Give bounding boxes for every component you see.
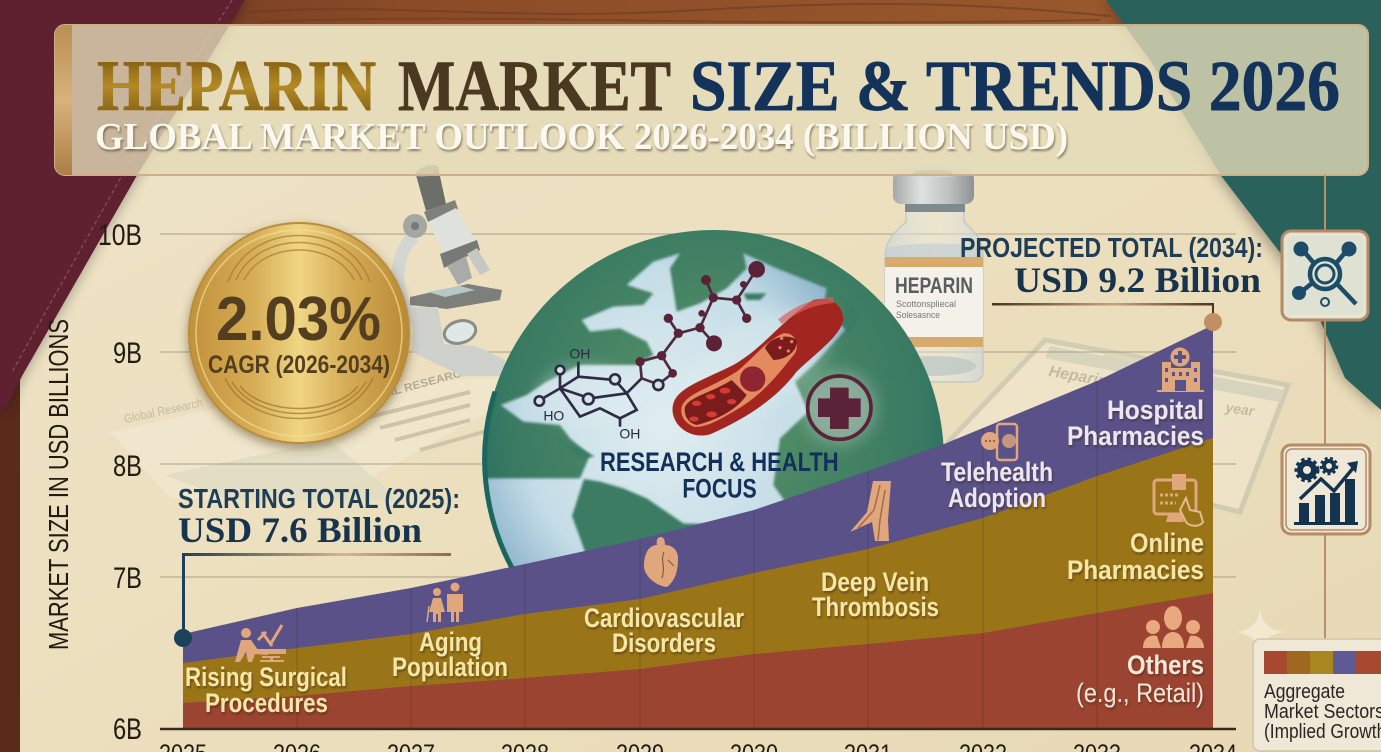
y axis tick labels: 6B (113, 713, 142, 746)
label: online pharmacies (1067, 528, 1204, 585)
icon: heparin vial: HEPARIN (895, 273, 973, 298)
icon: people group (1143, 606, 1204, 648)
label: telehealth adoption: Telehealth (941, 457, 1053, 487)
label: deep vein thrombosis: Thrombosis (812, 592, 939, 622)
y axis tick labels: 10B (98, 219, 142, 252)
label: rising surgical procedures (185, 662, 347, 718)
label: rising surgical procedures: Procedures (205, 688, 328, 718)
icon: elderly couple (427, 582, 463, 622)
decorative sparkle star (1236, 608, 1285, 656)
sector labels (185, 395, 1204, 718)
icon: online pharmacy monitor (1154, 474, 1203, 526)
label: telehealth adoption: Adoption (948, 483, 1046, 513)
label: online pharmacies: Pharmacies (1067, 555, 1204, 585)
icon: microscope (398, 163, 505, 376)
callout: projected total 2034 (960, 232, 1263, 331)
globe caption: RESEARCH & HEALTH (600, 447, 839, 477)
y axis title: MARKET SIZE IN USD BILLIONS (43, 319, 74, 650)
label: cardiovascular disorders: Cardiovascular (584, 603, 744, 633)
y axis tick labels (98, 219, 142, 746)
faded clipboard (950, 340, 1288, 512)
label: telehealth adoption (941, 457, 1053, 513)
label: aging population: Aging (419, 627, 482, 657)
label: aging population: Population (392, 652, 508, 682)
callout: starting total 2025: STARTING TOTAL (2025): (178, 483, 460, 514)
icon: telehealth phone (981, 424, 1017, 460)
area: hospital pharmacies and telehealth (purple) (183, 325, 1213, 729)
legend text (1264, 681, 1381, 743)
icon box: molecular research (1282, 231, 1368, 320)
globe illustration: OH (569, 345, 590, 361)
x axis year labels (159, 740, 1237, 752)
label: online pharmacies: Online (1130, 528, 1204, 558)
globe illustration (480, 230, 944, 690)
faded research documents: GENERAL RESEARCH (343, 366, 471, 411)
globe rim (485, 392, 540, 608)
label: cardiovascular disorders: Disorders (612, 628, 716, 658)
icon: surgery (235, 625, 286, 662)
title: MARKET (398, 46, 671, 126)
icon: heparin vial: Scottonspliecal (896, 299, 956, 310)
label: deep vein thrombosis (812, 567, 939, 622)
stacked area chart (183, 325, 1213, 729)
faded clipboard: Heparin (1047, 363, 1109, 390)
area: others (red) (183, 593, 1213, 729)
icon: heparin molecule (535, 261, 765, 427)
gold CAGR coin (189, 223, 409, 443)
label: deep vein thrombosis: Deep Vein (821, 567, 929, 597)
label: others: Others (1127, 650, 1204, 680)
subtitle: GLOBAL MARKET OUTLOOK 2026-2034 (BILLION USD) (95, 116, 1068, 158)
y axis tick labels: 9B (113, 337, 142, 370)
label: hospital pharmacies: Pharmacies (1067, 421, 1204, 451)
icon: heart (644, 537, 678, 587)
x axis line (160, 728, 1236, 730)
label: cardiovascular disorders (584, 603, 744, 658)
icon: heparin vial: Solesasnce (896, 310, 940, 321)
globe caption (600, 447, 839, 504)
legend box (1253, 639, 1381, 751)
callout: starting total 2025: USD 7.6 Billion (178, 510, 422, 550)
globe caption: FOCUS (682, 474, 757, 504)
faded research documents (110, 366, 510, 500)
icon: blood vessel (673, 299, 843, 436)
icon: hospital (1157, 347, 1204, 392)
label: others: (e.g., Retail) (1076, 678, 1204, 708)
y axis tick labels: 7B (113, 562, 142, 595)
globe illustration: OH (619, 425, 640, 441)
pale halo behind illustrations (537, 287, 876, 444)
label: rising surgical procedures: Rising Surgical (185, 662, 347, 692)
label: hospital pharmacies (1067, 395, 1204, 451)
callout: projected total 2034: PROJECTED TOTAL (2034): (960, 232, 1263, 263)
faded clipboard: year (1224, 399, 1257, 419)
right connector line (1324, 175, 1326, 642)
chart gridlines (160, 234, 1236, 577)
globe illustration: HO (543, 407, 564, 423)
label: aging population (392, 627, 508, 682)
y axis tick labels: 8B (113, 450, 142, 483)
title: HEPARIN (97, 46, 376, 126)
coin caption: CAGR (2026-2034) (208, 351, 390, 379)
icon: leg veins (850, 481, 891, 541)
coin value: 2.03% (216, 285, 381, 354)
legend text: Aggregate (1264, 681, 1345, 703)
label: hospital pharmacies: Hospital (1107, 395, 1204, 425)
teal book cover (1106, 0, 1381, 412)
maroon leather folder (0, 0, 247, 412)
callout: projected total 2034: USD 9.2 Billion (1014, 260, 1261, 300)
icon box: growth chart with gears (1282, 445, 1370, 534)
oceans (488, 252, 882, 566)
label: others (1076, 650, 1204, 708)
title (97, 46, 1340, 126)
icon: medical cross (808, 376, 871, 439)
callout: starting total 2025 (174, 483, 460, 647)
header panel (55, 25, 1368, 175)
globe base (484, 230, 944, 690)
icon: heparin vial (885, 167, 983, 382)
area: online pharmacies (gold) (183, 438, 1213, 729)
continents (570, 292, 848, 552)
legend swatches (1264, 651, 1381, 674)
faded research documents: Global Research (123, 396, 204, 426)
